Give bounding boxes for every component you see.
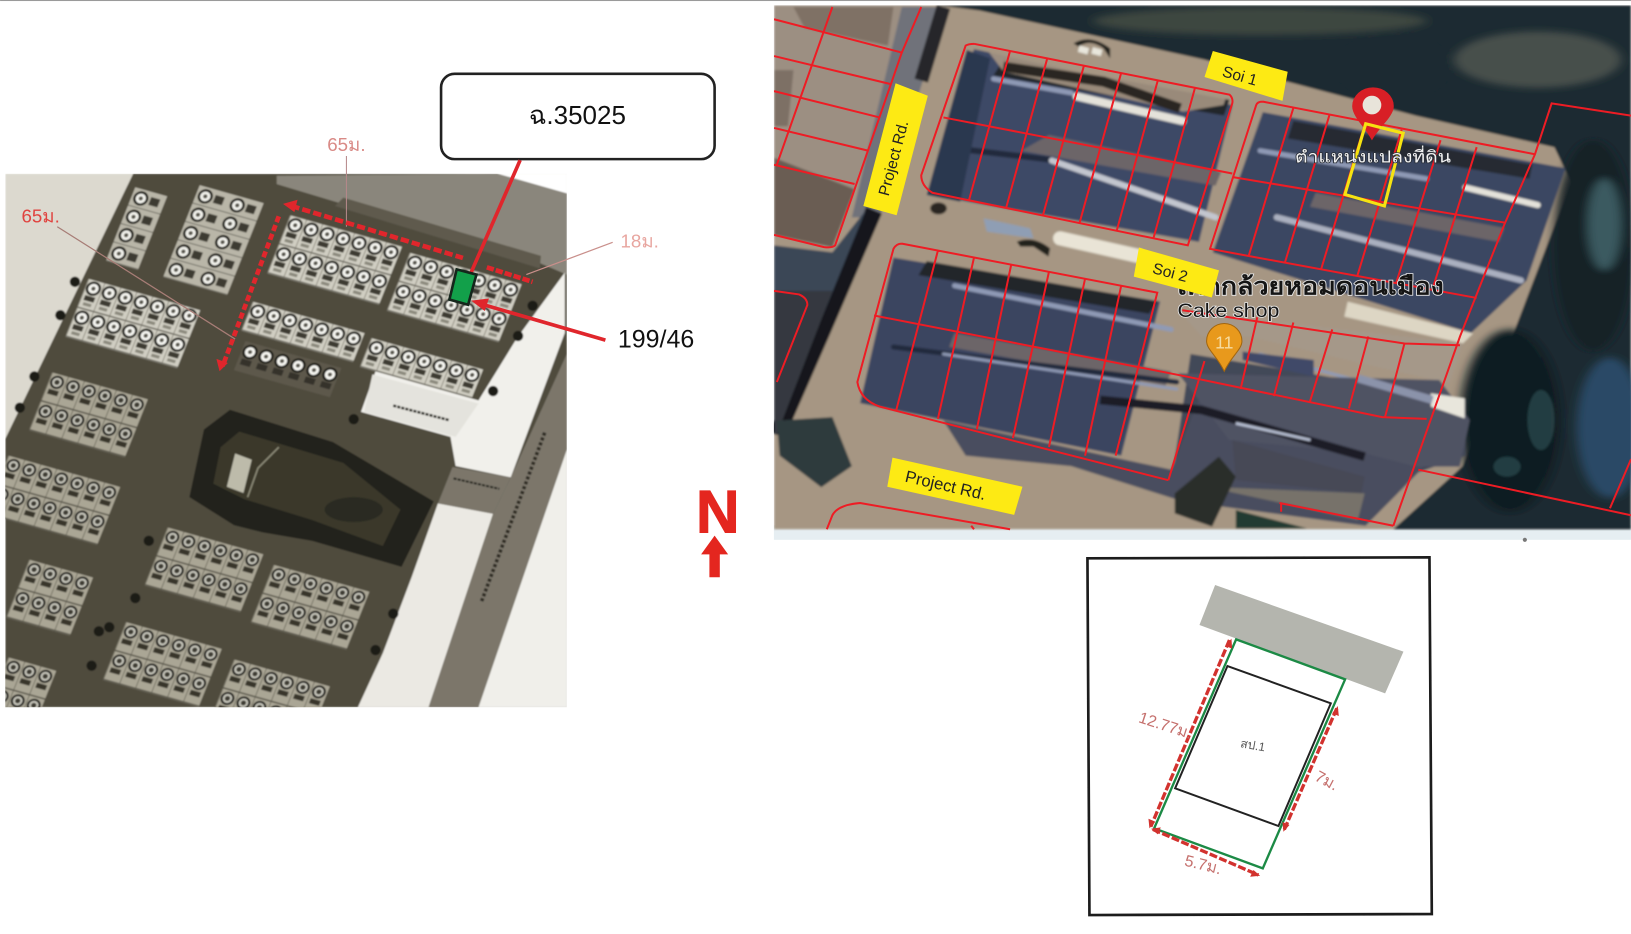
highlighted parcel outline	[1345, 124, 1403, 206]
label: Soi 2: Soi 2	[1151, 260, 1189, 286]
map text: cake shop name: Cake shop	[1177, 300, 1279, 322]
house lot blocks	[0, 185, 522, 744]
panel: plot diagram	[1087, 557, 1432, 915]
dimension: top 65 m	[283, 134, 463, 258]
building footprint	[1175, 666, 1331, 826]
parcel grid lines	[774, 7, 1631, 529]
dimension: 5.7 m	[1151, 827, 1260, 878]
arrow: plot number pointer	[471, 299, 605, 340]
label: Project Rd. vertical: Project Rd.	[876, 119, 912, 198]
dimension: 7 m	[1282, 706, 1341, 832]
callout: parcel number box	[441, 74, 715, 159]
dimension: left 65 m	[21, 206, 279, 371]
building roofs	[860, 49, 1566, 526]
upper left roof shading and cars	[927, 39, 1227, 257]
icon: orange map pin: 11	[1215, 332, 1233, 352]
north arrow: N	[696, 478, 740, 546]
plot boundary	[1154, 639, 1345, 868]
dimension: left 65 m: 65ม.	[21, 206, 60, 227]
icon: red location pin	[1352, 87, 1394, 140]
site plan park area	[189, 410, 434, 567]
lower right roofs and shadows	[1100, 302, 1555, 528]
label: Soi 2	[1134, 248, 1219, 297]
dimension: 12.77 m	[1136, 639, 1232, 828]
highlighted plot	[449, 269, 476, 305]
north arrow	[696, 478, 740, 577]
label: Project Rd. vertical	[863, 83, 928, 215]
dimension: top 65 m: 65ม.	[327, 134, 366, 155]
dimension: 12.77 m: 12.77ม.	[1136, 710, 1194, 743]
icon: orange map pin	[1207, 323, 1242, 371]
label: Soi 1	[1204, 51, 1288, 101]
dimension: 7 m: 7ม.	[1312, 768, 1341, 795]
panel: aerial map	[774, 5, 1631, 542]
roof highlights	[893, 79, 1538, 400]
road lettering on plan	[482, 432, 545, 601]
left plots and canal	[774, 5, 946, 487]
building footprint: สป.1	[1239, 736, 1267, 754]
dimension: 18 m: 18ม.	[621, 231, 659, 252]
callout: parcel number box: ฉ.35025	[529, 100, 626, 130]
vegetation background	[938, 5, 1631, 529]
map text: land plot position: ตำแหน่งแปลงที่ดิน	[1295, 145, 1451, 166]
label: Project Rd. horizontal: Project Rd.	[903, 467, 988, 504]
label: Soi 1: Soi 1	[1220, 64, 1259, 90]
dimension: 5.7 m: 5.7ม.	[1183, 853, 1223, 878]
road strip	[1199, 585, 1403, 693]
map text: cake shop name	[1177, 273, 1444, 322]
label: plot number: 199/46	[618, 325, 694, 353]
callout line to parcel	[470, 160, 520, 275]
dimension: 18 m	[487, 231, 659, 282]
panel: site plan map	[0, 174, 567, 744]
map text: cake shop name: เค้กกล้วยหอมดอนเมือง	[1177, 273, 1444, 300]
lot marker dots	[15, 277, 538, 671]
label: Project Rd. horizontal	[887, 458, 1022, 515]
